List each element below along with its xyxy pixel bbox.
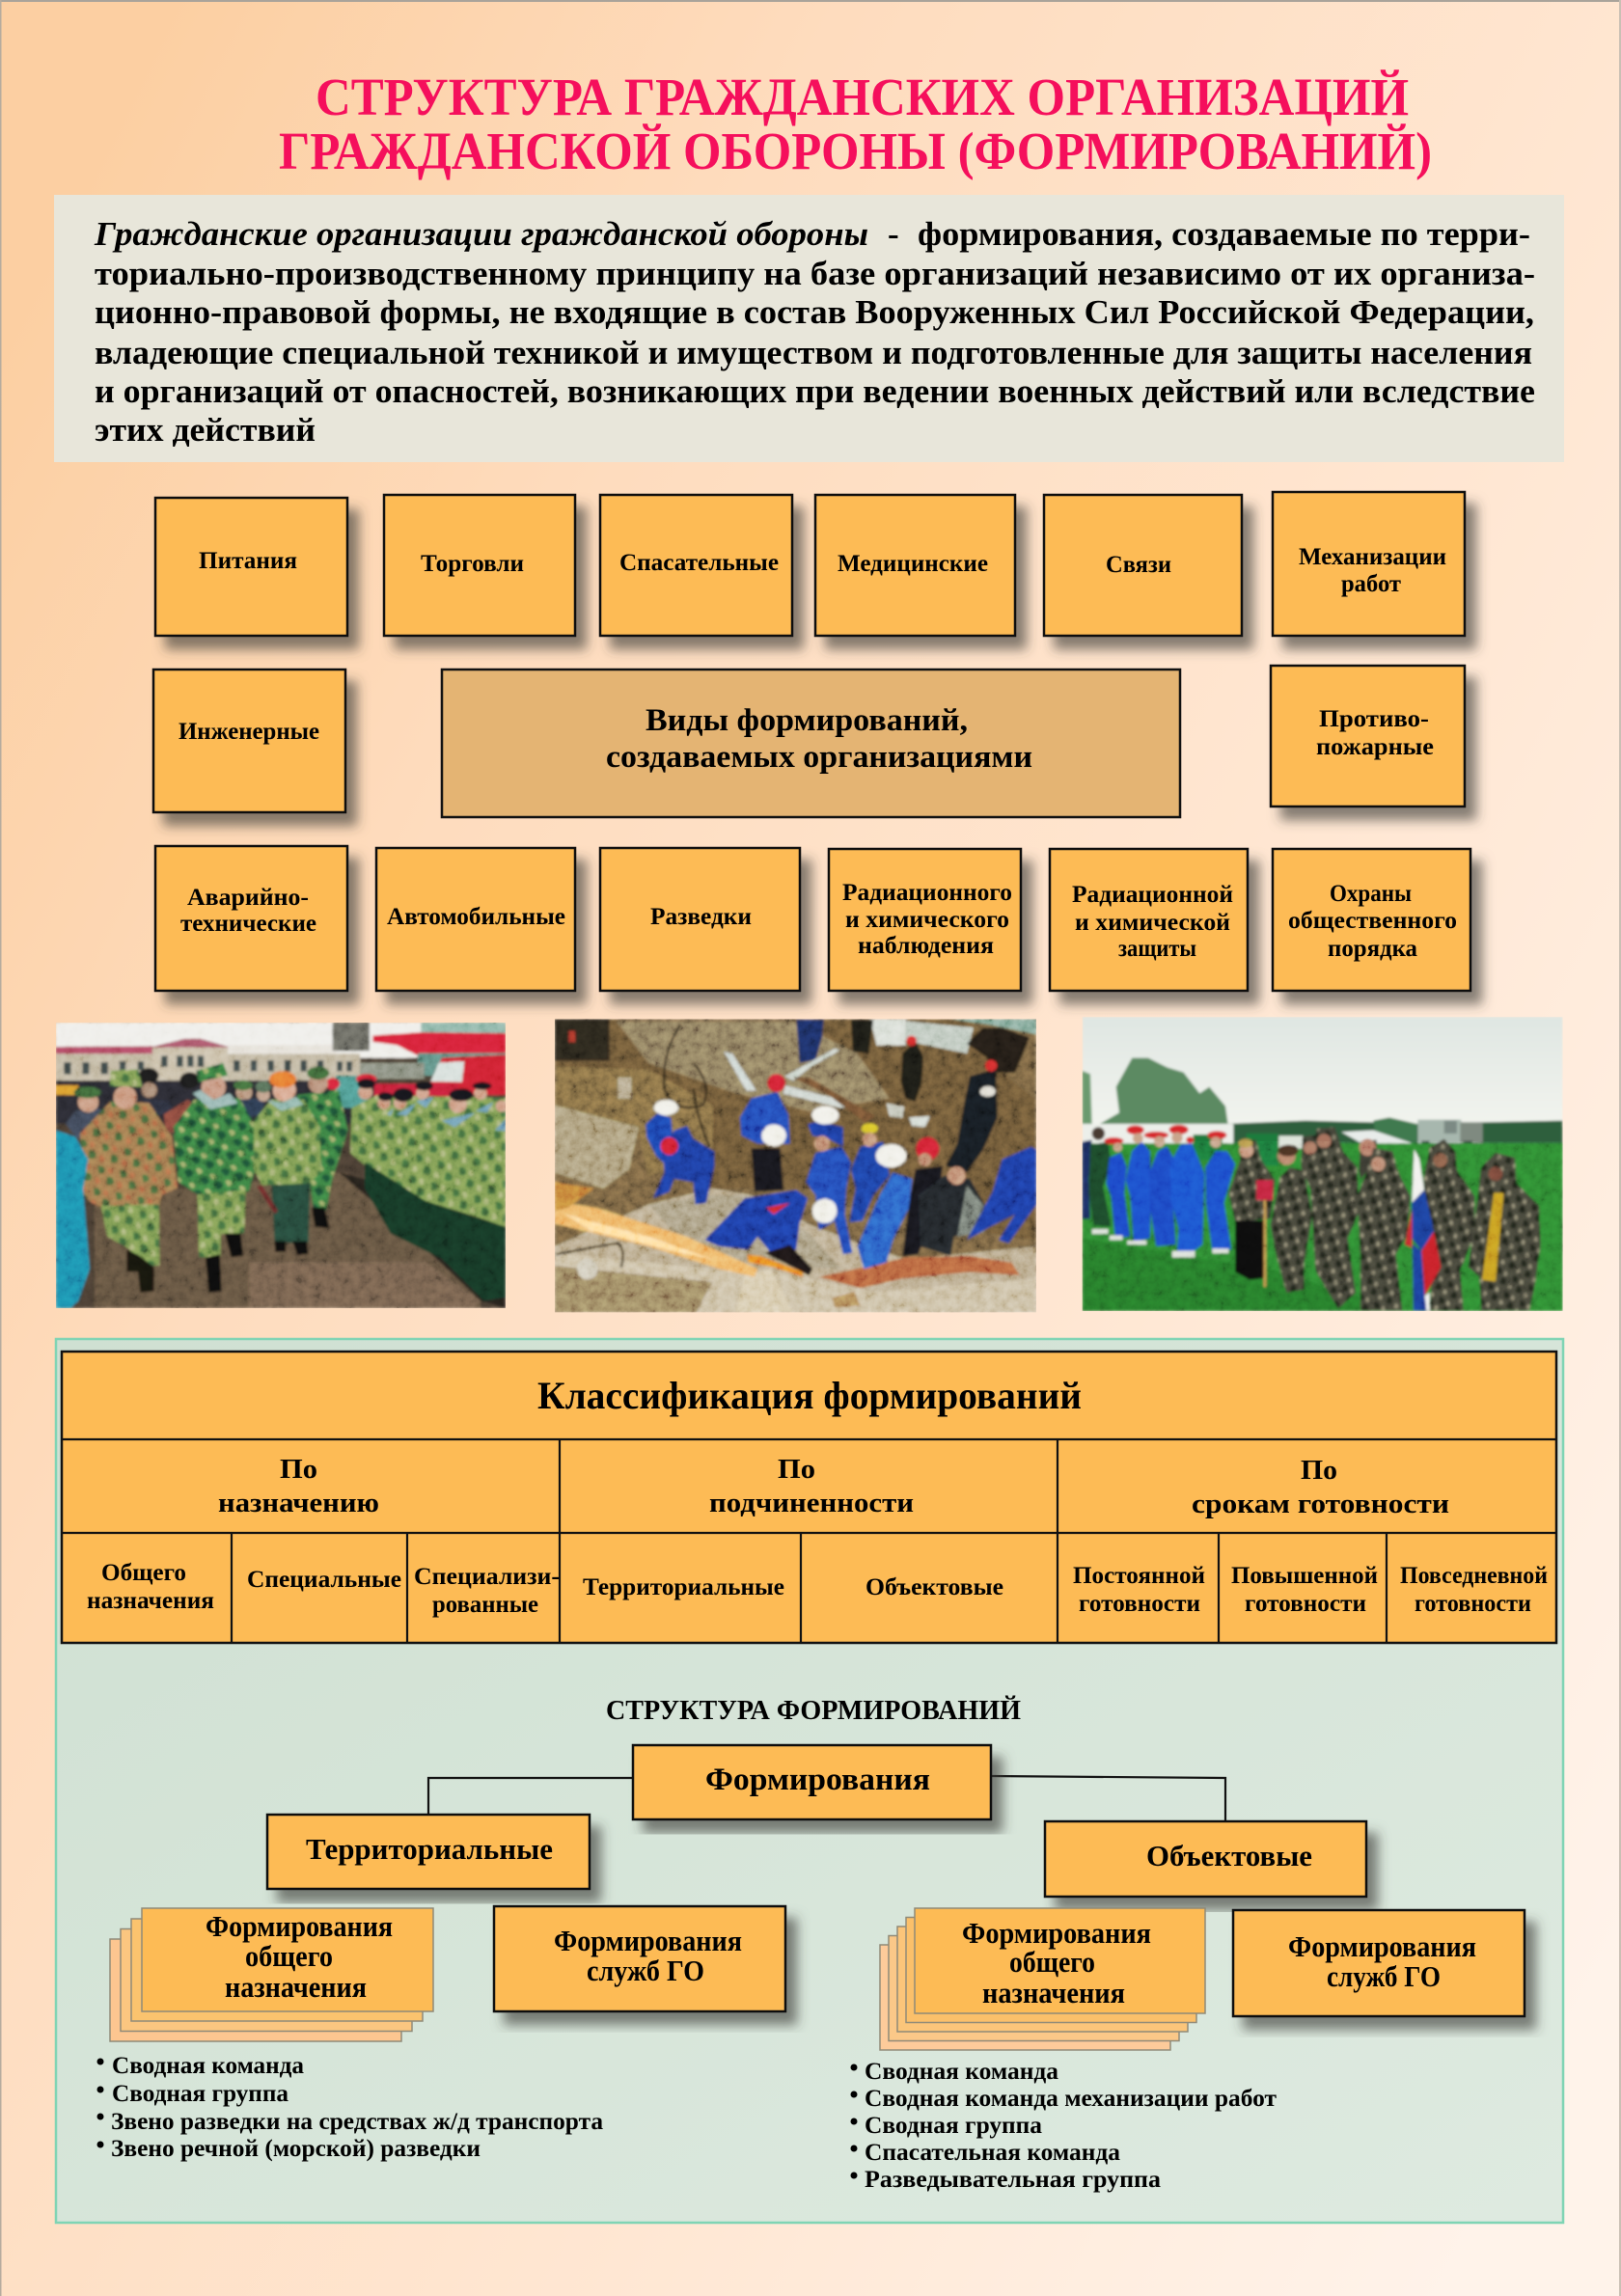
title	[279, 68, 1432, 180]
box: civil defence services, territorial: служб ГО	[587, 1954, 704, 1987]
box: Формирования	[633, 1745, 991, 1819]
box: Охраны общественного порядка: общественного	[1288, 908, 1457, 934]
table sub-cells: Повышенной	[1231, 1563, 1378, 1589]
box: Противопожарные: пожарные	[1316, 734, 1434, 760]
panel: classification and structure	[56, 1339, 1563, 2223]
list: territorial units	[96, 2053, 604, 2162]
box: civil defence services, object: служб ГО	[1327, 1959, 1441, 1993]
stack: general purpose formations, object: Формирования	[962, 1916, 1151, 1950]
box: Разведки	[600, 848, 800, 991]
box: Торговли: Торговли	[421, 551, 524, 577]
column: by readiness	[1192, 1456, 1449, 1519]
box: Радиационной и химической защиты: защиты	[1118, 936, 1196, 962]
teal coat person	[56, 1131, 90, 1308]
panel: definition text: ционно-правовой формы, не входящие в состав Вооруженных Сил Российской Федерации,	[95, 293, 1534, 331]
column: by subordination: По	[778, 1455, 815, 1485]
floor rubble	[555, 1189, 1036, 1312]
photo: officers inspecting personnel	[56, 1023, 508, 1308]
man 2	[174, 1098, 263, 1194]
stack: general purpose formations, object	[880, 1908, 1205, 2050]
box: Радиационного и химического наблюдения	[829, 849, 1021, 991]
rust band	[819, 1256, 1020, 1288]
box: Охраны общественного порядка	[1273, 849, 1470, 991]
box: Охраны общественного порядка: порядка	[1328, 936, 1417, 962]
list: object units: Спасательная команда	[865, 2140, 1120, 2166]
box: Медицинские	[815, 495, 1015, 636]
stack: general purpose formations, territorial: общего	[245, 1939, 333, 1973]
stack: general purpose formations, object: назначения	[982, 1976, 1125, 2009]
box: Связи: Связи	[1106, 552, 1171, 578]
box: Радиационной и химической защиты: Радиационной	[1072, 882, 1233, 908]
box: Механизации работ: работ	[1341, 571, 1401, 597]
man 3	[254, 1100, 321, 1185]
box: Торговли	[384, 495, 575, 636]
box: Питания	[155, 498, 347, 636]
box: Радиационной и химической защиты: и химической	[1075, 910, 1230, 936]
table sub-cells: готовности	[1415, 1591, 1531, 1617]
box: Противопожарные	[1271, 666, 1465, 806]
box: civil defence services, territorial	[494, 1906, 785, 2011]
box: Охраны общественного порядка: Охраны	[1330, 881, 1412, 907]
blue figures	[1083, 1140, 1092, 1218]
box: Территориальные	[267, 1815, 590, 1889]
table sub-cells	[87, 1560, 1548, 1618]
stack: general purpose formations, territorial: назначения	[225, 1970, 367, 2004]
panel: definition text: ториально-производственному принципу на базе организаций независимо от их организа-	[95, 255, 1535, 292]
column: by purpose	[218, 1455, 379, 1518]
list: object units: Сводная группа	[865, 2113, 1042, 2139]
title: СТРУКТУРА ГРАЖДАНСКИХ ОРГАНИЗАЦИЙ	[316, 68, 1409, 126]
panel: definition text: формирования, создаваемые по терри-	[918, 215, 1530, 253]
box: civil defence services, object	[1233, 1910, 1525, 2016]
box: Инженерные	[153, 670, 345, 812]
box: Разведки: Разведки	[650, 904, 752, 930]
stack: general purpose formations, territorial	[110, 1908, 433, 2041]
connector lines	[428, 1776, 1225, 1821]
column: by purpose: По	[280, 1455, 317, 1485]
table heading: Классификация формирований	[537, 1374, 1082, 1417]
box: Противопожарные: Противо-	[1319, 706, 1429, 732]
man 3 rear	[297, 1090, 348, 1211]
table sub-cells: Общего	[101, 1560, 186, 1586]
list: territorial units: Сводная группа	[112, 2081, 288, 2107]
box: Радиационного и химического наблюдения: наблюдения	[858, 933, 994, 959]
panel: definition text	[54, 195, 1564, 462]
table sub-cells: Постоянной	[1073, 1563, 1205, 1589]
list: object units: Разведывательная группа	[865, 2167, 1162, 2193]
box: Территориальные: Территориальные	[306, 1832, 553, 1866]
structure heading: СТРУКТУРА ФОРМИРОВАНИЙ	[606, 1696, 1021, 1726]
box: Аварийно-технические: технические	[180, 911, 316, 937]
box: Связи	[1044, 495, 1242, 636]
box: central heading	[442, 670, 1180, 817]
box: Аварийно-технические	[155, 846, 347, 991]
table sub-cells: готовности	[1245, 1591, 1366, 1617]
panel: types of formations	[153, 492, 1470, 991]
title: ГРАЖДАНСКОЙ ОБОРОНЫ (ФОРМИРОВАНИЙ)	[279, 122, 1432, 180]
box: central heading: Виды формирований,	[646, 703, 968, 738]
man 1	[80, 1102, 178, 1208]
box: Медицинские: Медицинские	[838, 551, 988, 577]
table sub-cells: Повседневной	[1400, 1563, 1548, 1589]
table sub-cells: Специализи-	[414, 1564, 560, 1590]
panel: definition text: Гражданские организации гражданской обороны	[94, 215, 868, 253]
list: territorial units: Сводная команда	[112, 2053, 305, 2079]
debris light	[724, 1052, 756, 1090]
box: Формирования: Формирования	[705, 1763, 930, 1797]
box: Автомобильные	[376, 848, 575, 991]
helmets	[654, 1100, 907, 1223]
box: Спасательные	[600, 495, 792, 636]
table sub-cells: Территориальные	[583, 1574, 784, 1600]
blue figures	[646, 1113, 680, 1169]
box: Инженерные: Инженерные	[179, 719, 319, 745]
table sub-cells: Специальные	[247, 1567, 401, 1593]
table: classification of formations	[62, 1352, 1556, 1643]
background figures	[65, 1107, 102, 1139]
table sub-cells: назначения	[87, 1588, 214, 1614]
box: Спасательные: Спасательные	[619, 550, 779, 576]
box: civil defence services, territorial: Формирования	[554, 1924, 742, 1957]
box: Объектовые	[1045, 1821, 1366, 1897]
panel: definition text: этих действий	[95, 411, 316, 449]
column: by subordination: подчиненности	[709, 1489, 914, 1518]
list: object units	[851, 2059, 1277, 2193]
table sub-cells: Объектовые	[865, 1574, 1003, 1600]
stack: general purpose formations, object: общего	[1009, 1945, 1095, 1979]
panel: definition text: владеющие специальной техникой и имуществом и подготовленные для защиты населения	[95, 334, 1532, 371]
box: Аварийно-технические: Аварийно-	[187, 885, 309, 911]
box: Радиационного и химического наблюдения: и химического	[845, 907, 1009, 933]
column: by subordination	[709, 1455, 914, 1518]
box: Питания: Питания	[199, 548, 297, 574]
box: civil defence services, object: Формирования	[1288, 1929, 1476, 1963]
box: central heading: создаваемых организациями	[606, 740, 1032, 775]
camouflage figures	[1228, 1140, 1276, 1222]
column: by purpose: назначению	[218, 1489, 379, 1518]
box: Механизации работ: Механизации	[1299, 544, 1446, 570]
column: by readiness: срокам готовности	[1192, 1490, 1449, 1519]
right formation	[350, 1095, 506, 1227]
panel: definition text: и организаций от опасностей, возникающих при ведении военных действий или вследствие	[95, 372, 1535, 410]
list: object units: Сводная команда механизации работ	[865, 2086, 1277, 2112]
list: object units: Сводная команда	[865, 2059, 1059, 2085]
photo: cadets and flag on a field	[1083, 1017, 1563, 1311]
box: Радиационной и химической защиты	[1050, 849, 1248, 991]
list: territorial units: Звено разведки на средствах ж/д транспорта	[111, 2109, 604, 2135]
flag	[1412, 1150, 1424, 1203]
photo: rescuers on rubble	[555, 1019, 1036, 1312]
box: Радиационного и химического наблюдения: Радиационного	[842, 880, 1012, 906]
list: territorial units: Звено речной (морской) разведки	[111, 2136, 481, 2162]
stack: general purpose formations, territorial: Формирования	[206, 1909, 393, 1943]
panel: definition text: -	[888, 215, 899, 253]
box: Механизации работ	[1273, 492, 1465, 636]
table sub-cells: готовности	[1079, 1591, 1200, 1617]
table sub-cells: рованные	[432, 1592, 538, 1618]
box: Автомобильные: Автомобильные	[387, 904, 565, 930]
sparks	[555, 1201, 757, 1277]
sign	[1256, 1180, 1273, 1200]
box: Объектовые: Объектовые	[1146, 1839, 1312, 1872]
column: by readiness: По	[1301, 1456, 1337, 1486]
ground	[95, 1172, 483, 1308]
